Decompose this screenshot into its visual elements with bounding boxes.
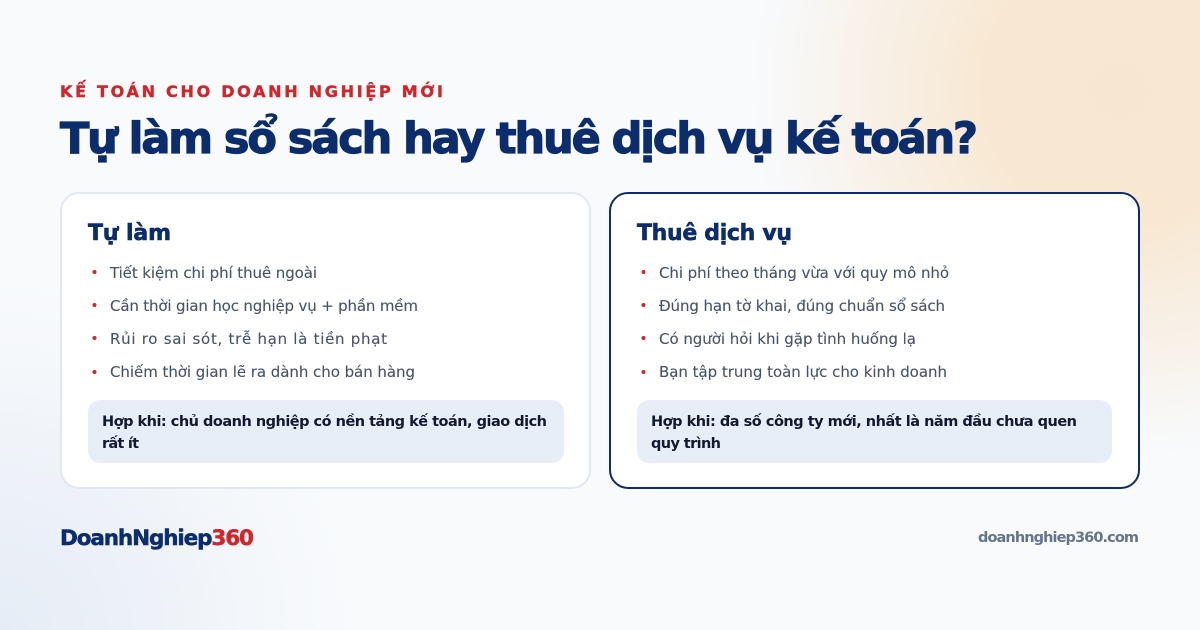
panel: thuê dịch vụ [610, 193, 1139, 488]
callout: thuê dịch vụ [637, 400, 1112, 463]
callout: tự làm: rất ít [102, 435, 139, 452]
list: tự làm [92, 264, 418, 381]
brand logo: DoanhNghiep360 [60, 526, 254, 551]
callout: thuê dịch vụ: Hợp khi: đa số công ty mới, nhất là năm đầu chưa quen [651, 413, 1077, 430]
heading: thuê dịch vụ: Thuê dịch vụ [637, 221, 792, 246]
heading: tự làm: Tự làm [88, 221, 171, 246]
list: tự làm: Cần thời gian học nghiệp vụ + phần mềm [110, 297, 418, 315]
callout: tự làm: Hợp khi: chủ doanh nghiệp có nền tảng kế toán, giao dịch [102, 413, 547, 430]
list: thuê dịch vụ: Đúng hạn tờ khai, đúng chuẩn sổ sách [659, 297, 945, 315]
title: Tự làm sổ sách hay thuê dịch vụ kế toán? [60, 113, 978, 164]
list: thuê dịch vụ: Có người hỏi khi gặp tình huống lạ [659, 330, 916, 348]
website url: doanhnghiep360.com [978, 530, 1139, 546]
list: thuê dịch vụ: Chi phí theo tháng vừa với quy mô nhỏ [659, 264, 949, 282]
list: tự làm: Tiết kiệm chi phí thuê ngoài [109, 264, 317, 282]
list: tự làm: Rủi ro sai sót, trễ hạn là tiền phạt [110, 330, 387, 348]
eyebrow: KẾ TOÁN CHO DOANH NGHIỆP MỚI [60, 80, 443, 101]
list: thuê dịch vụ [642, 264, 949, 381]
list: tự làm: Chiếm thời gian lẽ ra dành cho bán hàng [110, 363, 415, 381]
list: thuê dịch vụ: Bạn tập trung toàn lực cho kinh doanh [659, 363, 947, 381]
callout: thuê dịch vụ: quy trình [651, 436, 721, 452]
panel: tự làm [61, 193, 590, 488]
callout: tự làm [88, 400, 564, 463]
